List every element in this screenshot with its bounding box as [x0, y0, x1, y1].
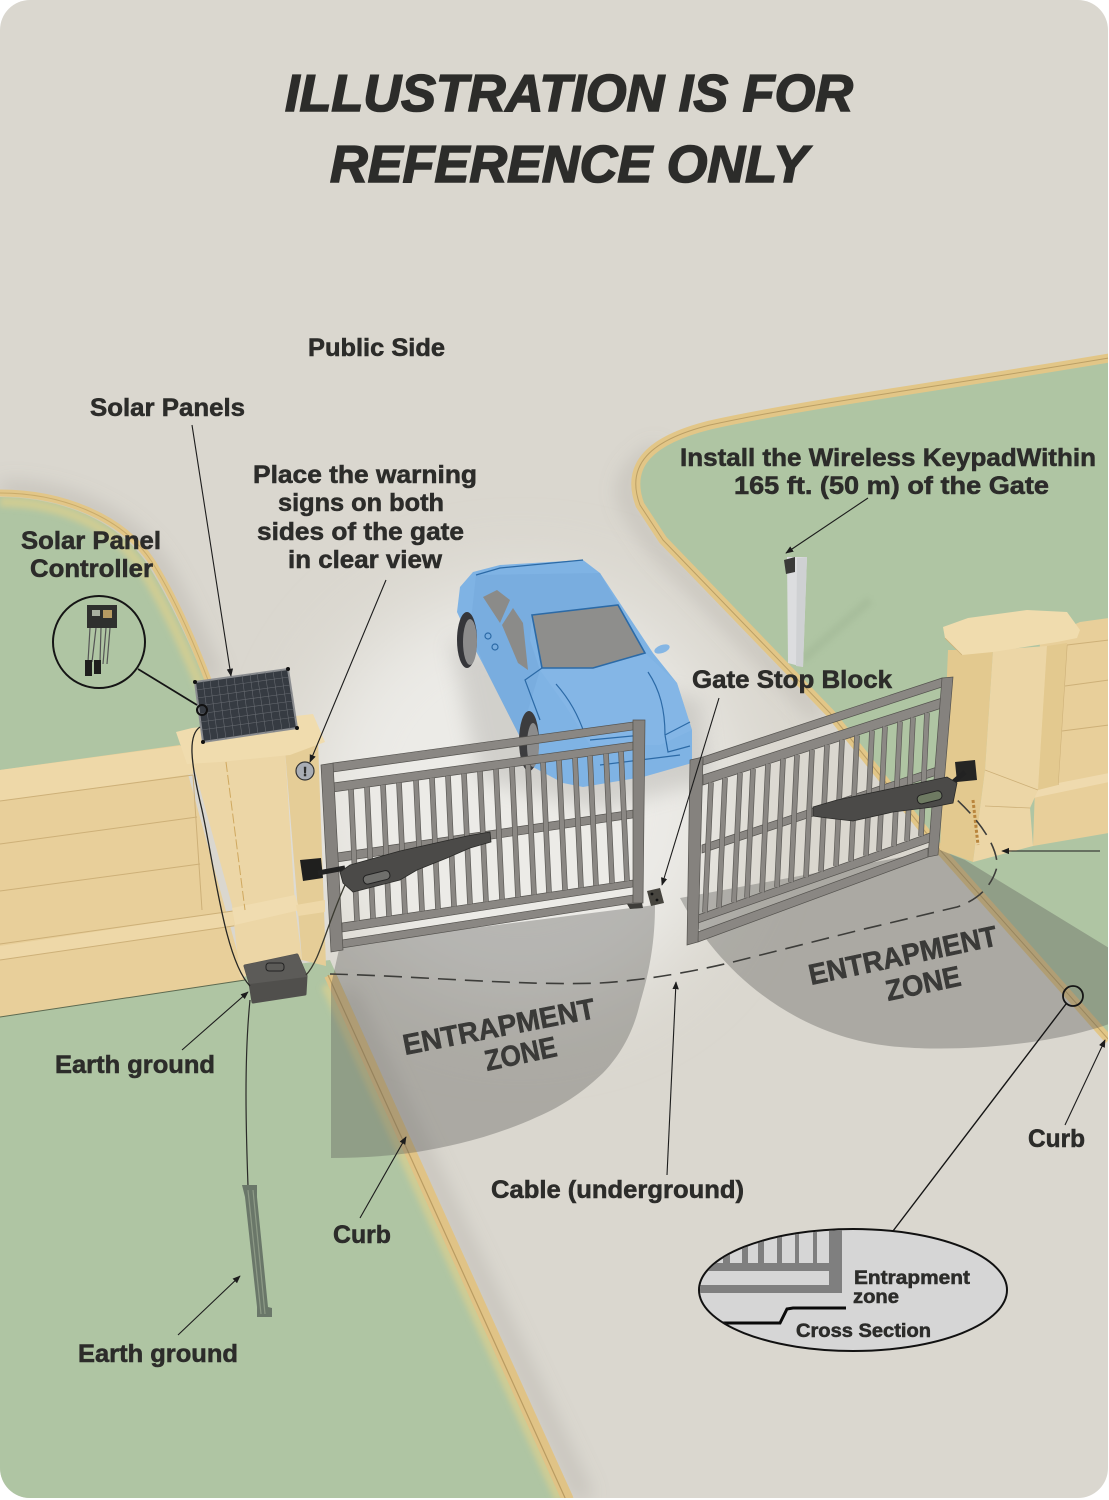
cross section inset	[695, 1228, 1007, 1351]
right actuator	[813, 760, 977, 821]
entrapment zone: left	[331, 905, 655, 1158]
label: warning signs: Place the warning	[253, 461, 477, 489]
label: public side: Public Side	[308, 334, 445, 362]
lawn: right	[636, 358, 1109, 1040]
title: REFERENCE ONLY	[330, 136, 812, 194]
icon: wireless keypad	[784, 557, 795, 574]
label: warning signs: sides of the gate	[257, 518, 464, 546]
car	[457, 560, 692, 787]
cross section inset: Entrapment	[854, 1267, 971, 1289]
cross section pointer	[893, 986, 1083, 1231]
light patch around gate	[310, 590, 730, 1010]
cable from box to actuator	[306, 885, 345, 975]
underground cable (dashed)	[330, 798, 997, 984]
car details	[476, 560, 690, 765]
right gate rails	[698, 678, 942, 942]
label: earth ground lower: Earth ground	[78, 1340, 238, 1368]
car windshield	[532, 605, 645, 668]
inset connector	[138, 669, 207, 715]
lawn: upper left	[0, 497, 204, 770]
label: earth ground upper: Earth ground	[55, 1051, 215, 1079]
earth rod	[242, 1185, 272, 1317]
label: gate stop block: Gate Stop Block	[692, 666, 892, 694]
label: wireless keypad: 165 ft. (50 m) of the Gate	[734, 472, 1049, 500]
left actuator	[300, 832, 491, 892]
label: warning signs	[253, 461, 477, 574]
label: curb right: Curb	[1028, 1125, 1085, 1153]
controller inset	[53, 596, 145, 688]
zone text: left: ENTRAPMENT	[400, 993, 598, 1062]
car front wheel	[519, 711, 539, 771]
arrows	[178, 425, 1105, 1335]
label: cable underground: Cable (underground)	[491, 1176, 744, 1204]
label: wireless keypad: Install the Wireless KeypadWithin	[680, 444, 1096, 472]
lawn: lower left	[0, 960, 573, 1500]
car shadow	[450, 640, 710, 810]
shadows along curbs	[0, 450, 820, 1500]
left wall	[0, 744, 245, 1017]
car mirror	[654, 644, 670, 654]
car side windows	[483, 590, 528, 670]
label: solar panel controller: Controller	[30, 555, 153, 583]
warning sign: !	[303, 764, 307, 779]
warning sign	[296, 762, 314, 780]
solar panel	[193, 667, 299, 744]
cable from solar panel to box	[192, 727, 250, 986]
label: warning signs: in clear view	[288, 546, 443, 574]
title	[285, 65, 853, 194]
keypad post	[784, 557, 807, 667]
control box	[245, 955, 306, 1002]
right gate	[687, 677, 953, 945]
zone text: right: ENTRAPMENT	[806, 921, 1001, 992]
earth wire	[246, 1000, 250, 1186]
lawn edge glow	[0, 502, 560, 1500]
title: ILLUSTRATION IS FOR	[285, 65, 853, 123]
car rear wheel	[457, 612, 477, 668]
left pillar	[176, 714, 326, 978]
cross section inset: Cross Section	[796, 1320, 931, 1342]
zone text: right: ZONE	[883, 961, 964, 1008]
label: solar panel controller	[21, 527, 161, 583]
right gate stiles	[687, 677, 953, 945]
label: wireless keypad	[680, 444, 1096, 500]
label: solar panels: Solar Panels	[90, 394, 245, 422]
cross section inset: zone	[853, 1286, 899, 1308]
label: curb left: Curb	[333, 1221, 391, 1249]
left gate stiles	[321, 720, 645, 952]
entrapment zone: right	[680, 850, 1109, 1049]
curbs	[0, 358, 1109, 1500]
label: solar panel controller: Solar Panel	[21, 527, 161, 555]
gate stop block	[647, 888, 664, 906]
left gate	[321, 720, 645, 952]
label: warning signs: signs on both	[278, 489, 444, 517]
right pillar	[940, 610, 1080, 862]
zone text: left: ZONE	[482, 1031, 560, 1078]
left gate rails	[333, 722, 633, 948]
right wall	[1033, 618, 1109, 846]
